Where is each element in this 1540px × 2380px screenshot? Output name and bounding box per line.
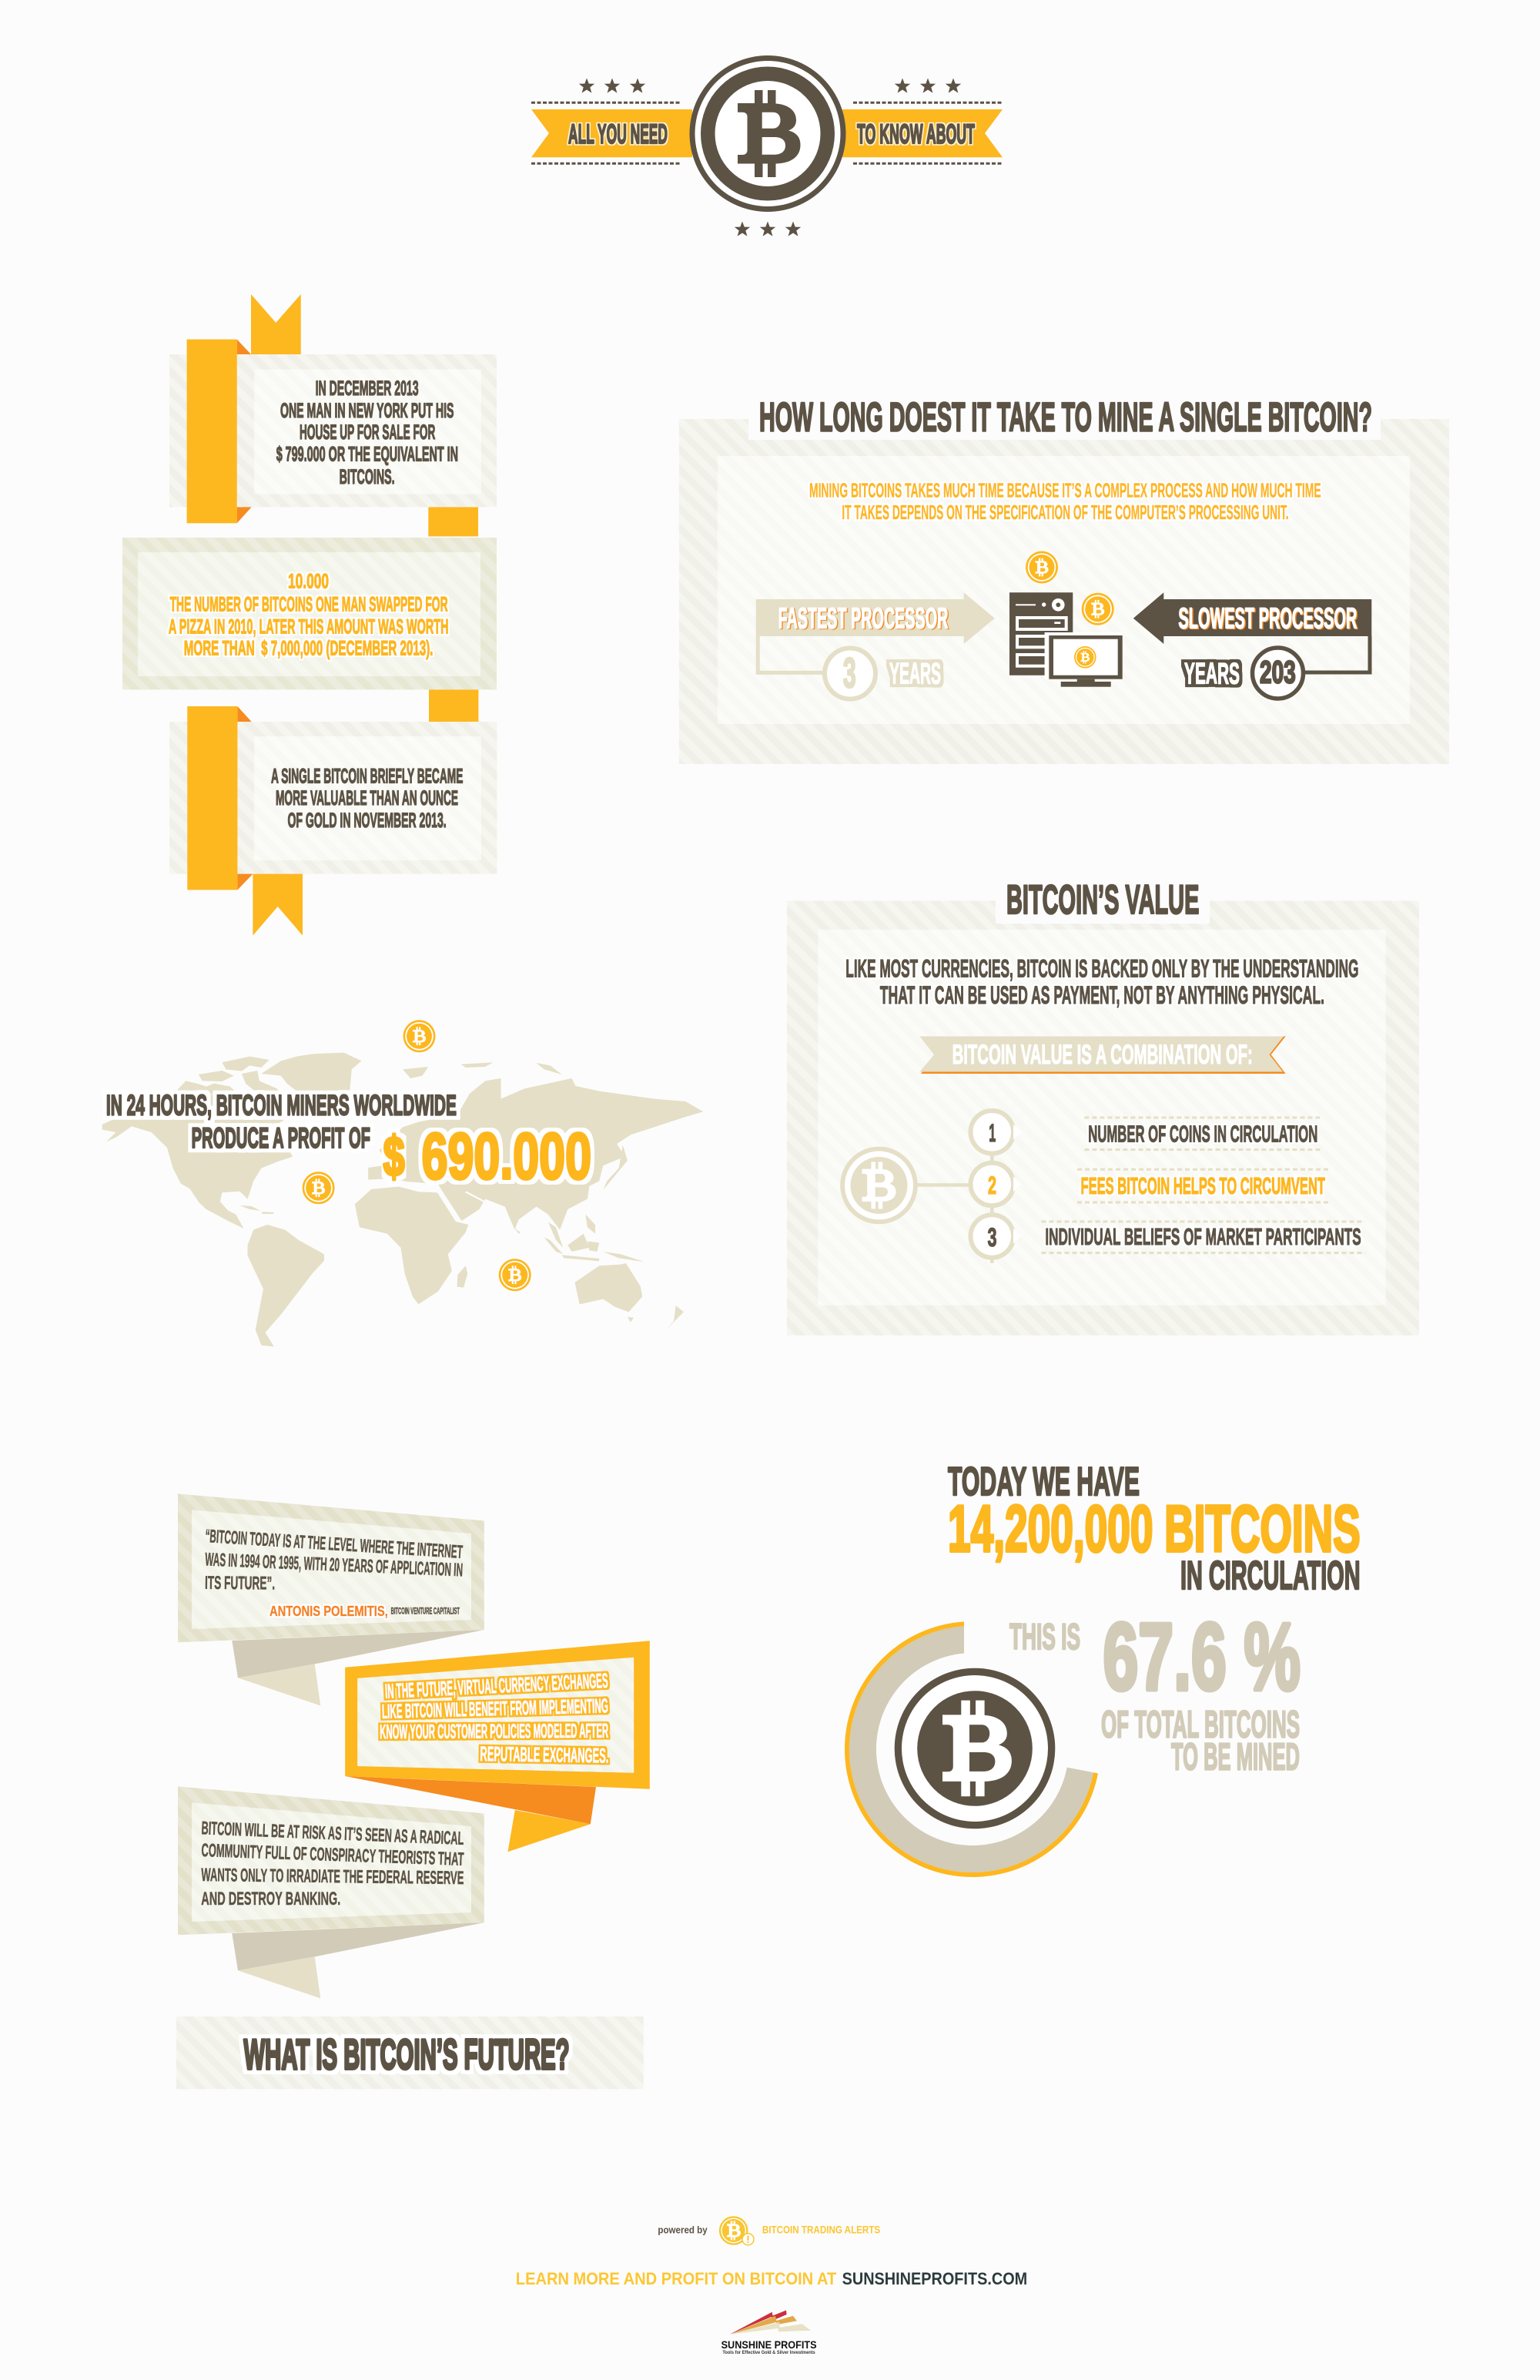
arrow: slowest processor: SLOWEST PROCESSOR (1178, 602, 1357, 635)
banner: quote 1: BITCOIN VENTURE CAPITALIST (391, 1607, 460, 1616)
icon: computer (1009, 592, 1123, 687)
profit value: 690.000 (422, 1120, 591, 1192)
title background (748, 397, 1381, 440)
profit value: $ (383, 1126, 405, 1188)
fastest value: 3 years (825, 649, 941, 699)
banner: quote 3: COMMUNITY FULL OF CONSPIRACY THEORISTS THAT (201, 1840, 464, 1870)
banner: quote 1: ITS FUTURE”. (205, 1573, 275, 1594)
panel: facts ribbon stack (122, 294, 497, 936)
map heading: PRODUCE A PROFIT OF (192, 1121, 370, 1154)
fact panel 3: A SINGLE BITCOIN BRIEFLY BECAME (271, 765, 463, 788)
heading: circulation: TODAY WE HAVE (948, 1460, 1140, 1504)
item 1: NUMBER OF COINS IN CIRCULATION (1088, 1121, 1317, 1148)
header badge: ALL YOU NEED (568, 119, 668, 149)
fastest value: 3 years: 3 (843, 649, 856, 697)
fact panel 2: A PIZZA IN 2010, LATER THIS AMOUNT WAS WORTH (169, 615, 448, 638)
title background (996, 882, 1210, 924)
icon: trading alerts coin (719, 2216, 754, 2245)
fact panel 2: MORE THAN $ 7,000,000 (DECEMBER 2013). (184, 636, 434, 659)
heading: future (176, 2016, 644, 2089)
ribbon band 1 (187, 340, 252, 523)
panel: bitcoin's future (176, 1493, 650, 2089)
slowest value: 203 years: YEARS (1184, 657, 1240, 690)
fact panel 1: BITCOINS. (340, 465, 395, 488)
ribbon: combination: BITCOIN VALUE IS A COMBINATION OF: (952, 1039, 1253, 1070)
item 3 (970, 1215, 1365, 1258)
banner: quote 1 (178, 1493, 484, 1705)
slowest value: 203 years (1184, 648, 1303, 699)
fact panel 1: HOUSE UP FOR SALE FOR (300, 421, 435, 444)
call to action: SUNSHINEPROFITS.COM (842, 2269, 1027, 2288)
gauge chart (845, 1621, 1098, 1877)
fact panel 3 (169, 722, 497, 874)
intro text (845, 954, 1358, 1009)
heading: value: BITCOIN’S VALUE (1006, 877, 1199, 923)
icon: map coin 1 (403, 1020, 436, 1052)
percentage text: THIS IS (1009, 1617, 1080, 1658)
icon: main bitcoin coin (690, 55, 845, 212)
banner: quote 3: WANTS ONLY TO IRRADIATE THE FEDERAL RESERVE (201, 1865, 464, 1889)
banner: quote 2: LIKE BITCOIN WILL BENEFIT FROM IMPLEMENTING (382, 1694, 608, 1723)
ribbon left (531, 109, 692, 157)
item 3: 3 (987, 1223, 996, 1252)
header badge (531, 55, 1003, 236)
banner: quote 3: BITCOIN WILL BE AT RISK AS IT’S SEEN AS A RADICAL (201, 1818, 464, 1849)
banner: quote 3: AND DESTROY BANKING. (201, 1889, 340, 1909)
item 2: FEES BITCOIN HELPS TO CIRCUMVENT (1081, 1172, 1325, 1199)
icon: coin on monitor (1074, 646, 1096, 669)
icon: stars (579, 79, 961, 236)
icon: coin right (1082, 593, 1114, 625)
fact panel 1 (169, 354, 497, 507)
heading: future: WHAT IS BITCOIN’S FUTURE? (243, 2031, 570, 2078)
logo: sunshine profits (721, 2311, 817, 2355)
powered by label: powered by (658, 2224, 708, 2235)
footer (516, 2216, 1027, 2355)
heading: circulation (948, 1460, 1361, 1598)
ribbon band 3 (187, 706, 253, 890)
heading: to know about: TO KNOW ABOUT (857, 119, 975, 149)
item 2 (970, 1163, 1329, 1205)
logo: sunshine profits: SUNSHINE PROFITS (721, 2338, 817, 2351)
world map section (102, 1020, 703, 1346)
fact panel 3: MORE VALUABLE THAN AN OUNCE (276, 786, 458, 810)
item 2: 2 (988, 1172, 996, 1199)
percentage text (1009, 1604, 1301, 1778)
call to action: LEARN MORE AND PROFIT ON BITCOIN AT (516, 2269, 837, 2288)
banner: quote 2: KNOW YOUR CUSTOMER POLICIES MODELED AFTER (380, 1719, 608, 1743)
intro text (809, 478, 1321, 524)
banner: quote 2 (345, 1641, 650, 1852)
banner: quote 1: ANTONIS POLEMITIS, (270, 1603, 388, 1619)
banner: quote 2: IN THE FUTURE, VIRTUAL CURRENCY EXCHANGES (384, 1669, 608, 1703)
icon: map coin 2 (303, 1172, 335, 1204)
fact panel 3: OF GOLD IN NOVEMBER 2013. (288, 809, 447, 832)
banner: quote 3 (178, 1786, 484, 1998)
ribbon top tail (251, 294, 301, 354)
icon: tan coin (840, 1147, 918, 1224)
fact panel 1: IN DECEMBER 2013 (316, 377, 419, 400)
arrow: fastest processor (756, 592, 995, 672)
icon: large coin (895, 1668, 1055, 1829)
connector 1 (428, 507, 478, 536)
panel: how long to mine (679, 394, 1449, 764)
fact panel 1: ONE MAN IN NEW YORK PUT HIS (280, 399, 454, 422)
panel: bitcoin's value (787, 877, 1419, 1336)
banner: quote 1: WAS IN 1994 OR 1995, WITH 20 YEARS OF APPLICATION IN (205, 1549, 464, 1581)
heading: circulation: IN CIRCULATION (1180, 1554, 1361, 1598)
fastest value: 3 years: YEARS (889, 657, 941, 690)
banner: quote 2: REPUTABLE EXCHANGES. (480, 1742, 609, 1768)
slowest value: 203 years: 203 (1260, 655, 1296, 690)
icon: coin top (1026, 551, 1058, 584)
arrow: fastest processor: FASTEST PROCESSOR (778, 602, 948, 635)
percentage text: OF TOTAL BITCOINS (1101, 1704, 1300, 1745)
percentage text: TO BE MINED (1171, 1736, 1300, 1778)
world map (102, 1053, 703, 1346)
connectors (917, 1154, 992, 1263)
connector 2 (429, 689, 478, 722)
map heading: IN 24 HOURS, BITCOIN MINERS WORLDWIDE (106, 1089, 457, 1121)
ribbon: combination (919, 1037, 1286, 1074)
logo: sunshine profits: Tools for Effective Gold & Silver Investments (722, 2350, 815, 2355)
ribbon bottom tail (253, 874, 303, 936)
fact panel 2 (122, 538, 497, 689)
fact panel 2: 10.000 (288, 570, 329, 593)
ribbon right (842, 109, 1003, 157)
map heading (106, 1089, 457, 1154)
percentage text: 67.6 % (1103, 1604, 1301, 1711)
fact panel 2: THE NUMBER OF BITCOINS ONE MAN SWAPPED FOR (170, 592, 448, 615)
profit value (383, 1120, 591, 1192)
trading alerts label: BITCOIN TRADING ALERTS (762, 2224, 880, 2235)
item 1 (970, 1111, 1321, 1154)
panel: bitcoins in circulation (845, 1460, 1361, 1877)
banner: quote 1: “BITCOIN TODAY IS AT THE LEVEL WHERE THE INTERNET (205, 1526, 464, 1563)
item 1: 1 (989, 1119, 996, 1147)
arrow: slowest processor (1133, 592, 1371, 672)
call to action (516, 2269, 1027, 2288)
fact panel 1: $ 799.000 OR THE EQUIVALENT IN (276, 443, 458, 466)
icon: map coin 3 (499, 1259, 531, 1291)
